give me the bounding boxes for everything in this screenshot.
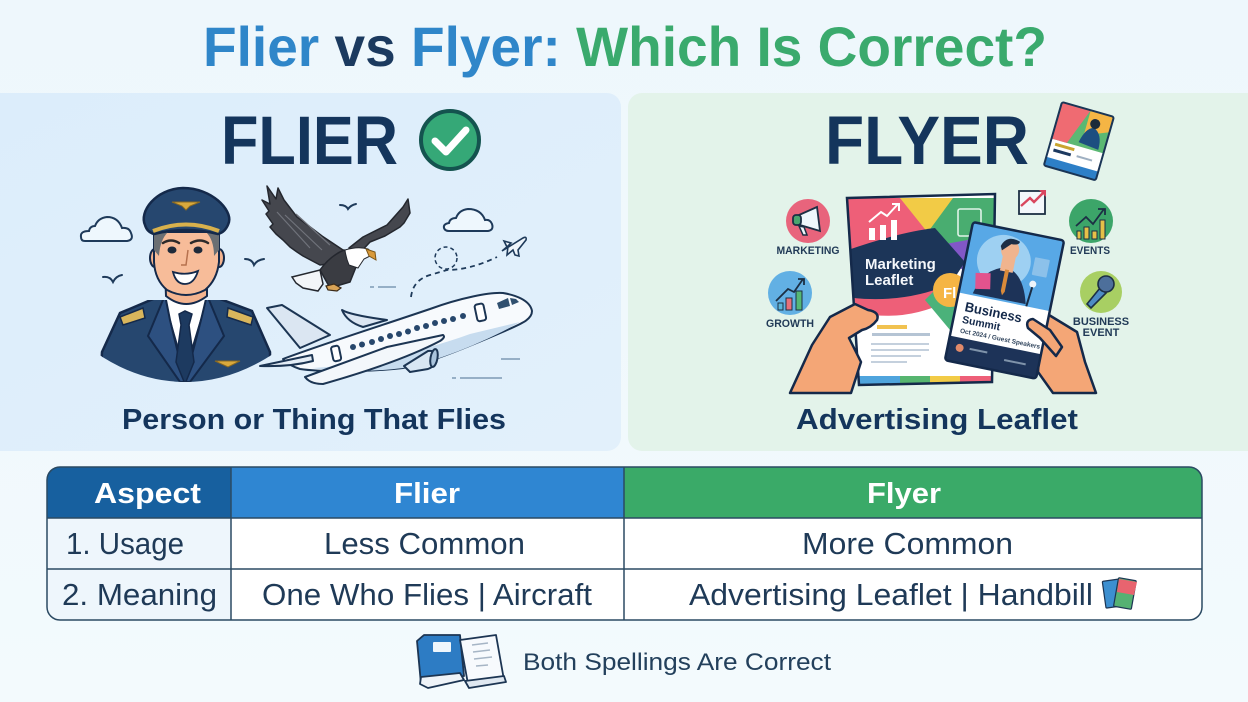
row: aspect label column <box>47 518 231 620</box>
card text: Business <box>963 299 1023 326</box>
label: events: EVENTS <box>1070 245 1110 257</box>
speed lines <box>370 287 520 378</box>
illustration: eagle <box>262 186 410 291</box>
icon: left cloud <box>81 217 132 241</box>
leaflet title: Leaflet <box>865 272 913 289</box>
illustration: business summit card <box>945 222 1064 379</box>
row: meaning: One Who Flies | Aircraft <box>262 577 592 612</box>
icon: microphone <box>1080 271 1122 313</box>
illustration: business summit card: Oct 2024 / Guest Speakers <box>959 328 1041 351</box>
row: meaning: 2. Meaning <box>62 577 217 612</box>
illustration: airplane <box>260 293 532 384</box>
caption: flier: Person or Thing That Flies <box>122 404 506 436</box>
label: growth: GROWTH <box>766 318 814 330</box>
caption: flyer: Advertising Leaflet <box>796 404 1078 436</box>
row: usage: Less Common <box>324 526 525 561</box>
icon: handbill cards <box>1102 578 1137 609</box>
row: usage: 1. Usage <box>66 526 184 561</box>
neck and face <box>165 270 207 304</box>
table header: Aspect <box>94 478 201 510</box>
illustration: right thumb <box>1027 319 1062 356</box>
label: business event: BUSINESS <box>1073 316 1129 328</box>
icon: events <box>1069 199 1113 243</box>
footer note: Both Spellings Are Correct <box>523 649 831 676</box>
comparison table <box>47 467 1202 620</box>
illustration: right palm <box>1038 315 1096 393</box>
icon: marketing <box>786 199 830 243</box>
clipboard glyph <box>958 209 981 236</box>
illustration: marketing leaflet <box>840 190 1000 390</box>
icon: small plane and dashed flight path <box>411 237 526 297</box>
icon: chart card <box>1019 190 1046 214</box>
illustration: left hand <box>790 304 878 393</box>
leaflet title: Marketing <box>865 256 936 273</box>
row: usage: More Common <box>802 526 1013 561</box>
table header <box>47 467 1202 518</box>
icon: right cloud <box>444 209 492 231</box>
row: meaning <box>62 577 1093 612</box>
panel: flyer <box>628 93 1248 451</box>
row: usage <box>66 526 1013 561</box>
icon: mini flyer <box>1044 102 1114 180</box>
heading: FLYER: FLYER <box>825 102 1029 179</box>
panel: flier <box>0 93 621 451</box>
icon: growth <box>768 271 812 315</box>
label: marketing: MARKETING <box>776 245 840 257</box>
heading: FLIER: FLIER <box>221 102 398 179</box>
illustration: business summit card: Summit <box>961 314 1002 333</box>
cap <box>144 188 229 234</box>
leaflet text lines <box>871 325 930 363</box>
icon: birds <box>103 204 356 282</box>
illustration: pilot <box>100 188 270 390</box>
label: business event: EVENT <box>1083 327 1120 339</box>
epaulettes <box>120 308 253 325</box>
table header: Flier <box>394 478 460 510</box>
title: Flier vs Flyer: Which Is Correct? <box>203 15 1047 78</box>
icon: green check <box>421 111 479 169</box>
table header: Flyer <box>867 478 941 510</box>
icon: books <box>417 635 506 688</box>
chart glyph <box>869 220 897 240</box>
row: meaning: Advertising Leaflet | Handbill <box>689 577 1093 612</box>
illustration: marketing leaflet: Fl <box>943 285 956 302</box>
